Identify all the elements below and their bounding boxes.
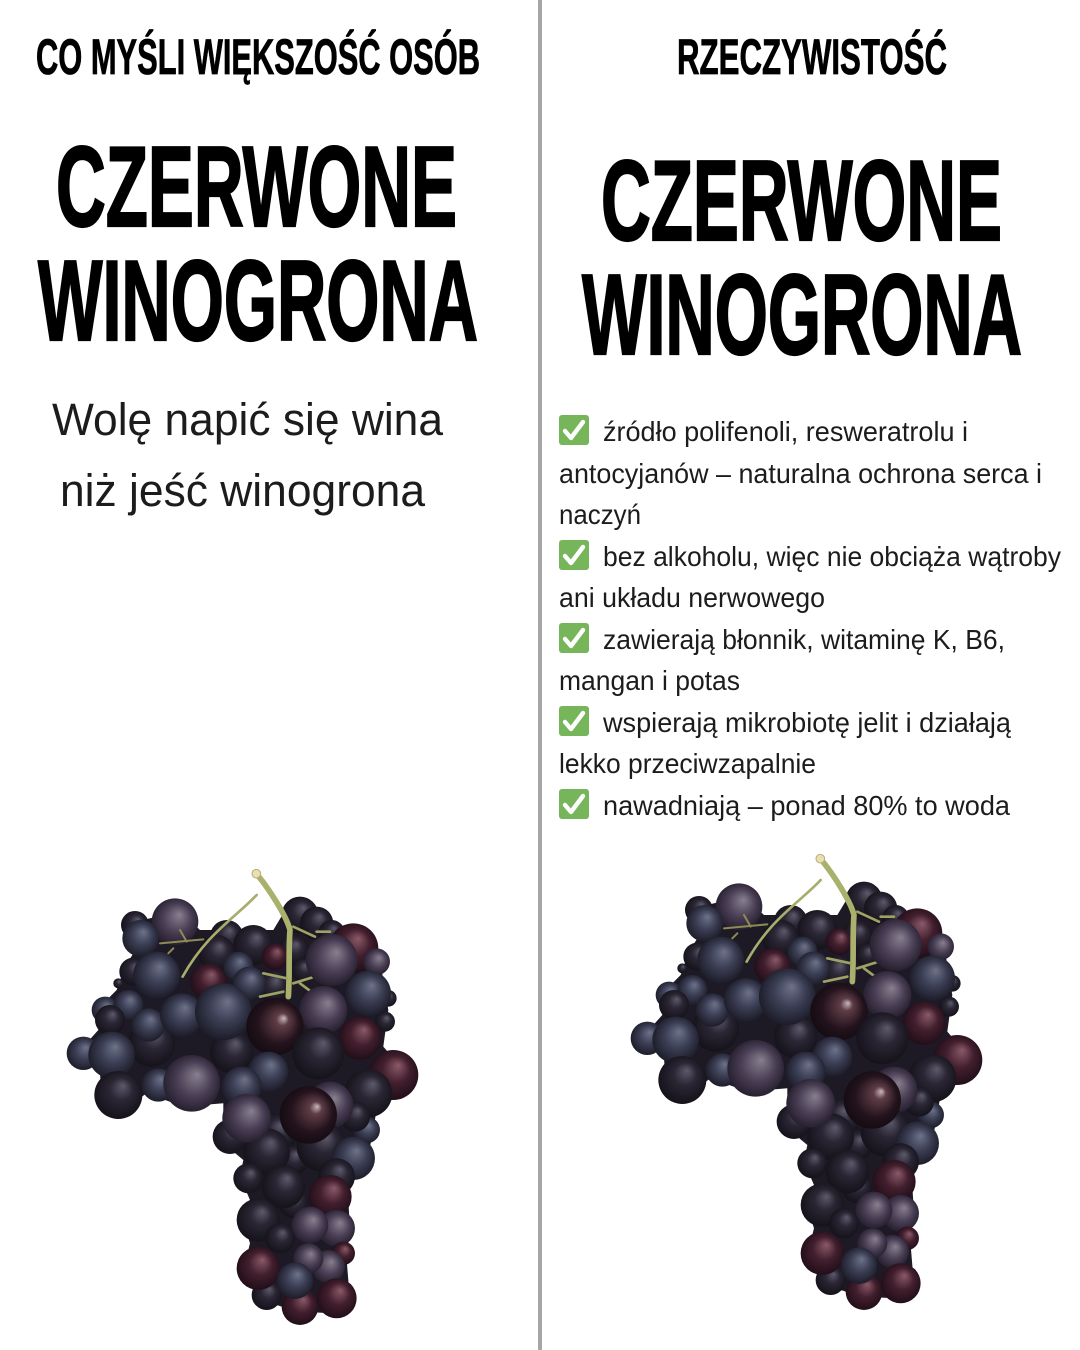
benefit 4: [559, 706, 1011, 779]
list of benefits: [559, 415, 1061, 821]
benefit 1: antocyjanów – naturalna ochrona serca i: [559, 458, 1042, 489]
image: bunch of grapes, left: [67, 869, 418, 1325]
text block: belief statement: [52, 394, 444, 516]
benefit 5: nawadniają – ponad 80% to woda: [603, 790, 1010, 821]
panel: what most people think: [36, 29, 480, 1325]
title: red grapes, left: WINOGRONA: [38, 238, 478, 365]
image: bunch of grapes, right: [631, 854, 982, 1310]
benefit 1: naczyń: [559, 499, 641, 530]
benefit 3: [559, 623, 1005, 696]
benefit 4: lekko przeciwzapalnie: [559, 748, 816, 779]
title: red grapes, left: [38, 124, 478, 365]
title: red grapes, left: CZERWONE: [56, 124, 457, 251]
divider between columns: [538, 0, 542, 1350]
benefit 4: wspierają mikrobiotę jelit i działają: [602, 707, 1011, 738]
benefit 2: [559, 540, 1061, 613]
heading: common belief: CO MYŚLI WIĘKSZOŚĆ OSÓB: [36, 29, 480, 85]
benefit 3: zawierają błonnik, witaminę K, B6,: [603, 624, 1005, 655]
benefit 2: ani układu nerwowego: [559, 582, 825, 613]
benefit 1: źródło polifenoli, resweratrolu i: [603, 416, 968, 447]
title: red grapes, right: [582, 138, 1022, 379]
panel: reality: [559, 29, 1061, 1310]
benefit 3: mangan i potas: [559, 665, 740, 696]
benefit 2: bez alkoholu, więc nie obciąża wątroby: [603, 541, 1061, 572]
benefit 1: [559, 415, 1042, 530]
text block: belief statement: Wolę napić się wina: [52, 394, 444, 445]
text block: belief statement: niż jeść winogrona: [60, 465, 426, 516]
